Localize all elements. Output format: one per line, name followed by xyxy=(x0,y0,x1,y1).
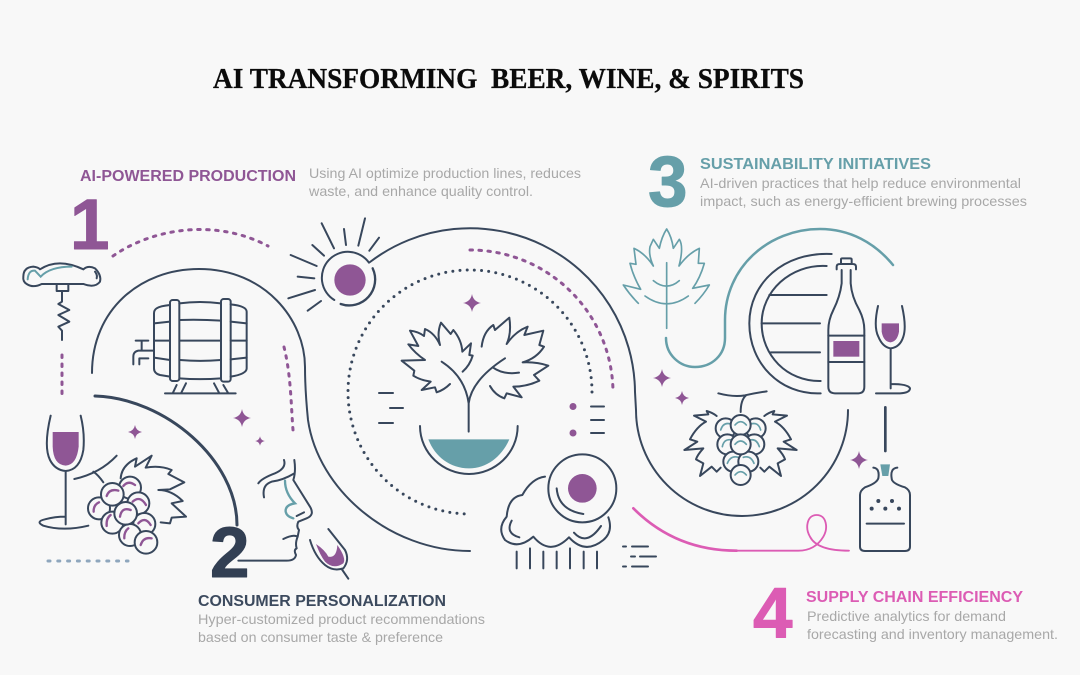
icon: sun xyxy=(288,218,379,311)
dashed line under corkscrew xyxy=(60,355,64,397)
connector: teal curve xyxy=(666,229,893,367)
dots and dashes right of plant xyxy=(570,403,604,436)
icon: barrel xyxy=(133,299,247,393)
step 3 heading: SUSTAINABILITY INITIATIVES xyxy=(700,156,931,173)
step 3 description: AI-driven practices that help reduce environmental xyxy=(700,175,1021,191)
icon: teal vine leaf xyxy=(623,229,709,328)
step 4 description: Predictive analytics for demand xyxy=(807,608,1006,624)
icon: sun and cloud with rain xyxy=(501,454,616,568)
connector: curve around barrel xyxy=(92,269,470,551)
icon: barrel end xyxy=(749,254,832,393)
icon: tilted wine glass xyxy=(310,529,348,579)
icon: wine glass left xyxy=(40,416,88,529)
step 4 heading: SUPPLY CHAIN EFFICIENCY xyxy=(806,589,1023,606)
step 1 number: 1 xyxy=(70,186,110,265)
step 2 number: 2 xyxy=(210,514,250,593)
dashed arc above barrel xyxy=(113,230,268,256)
icon: grape bunch left xyxy=(74,456,186,554)
decorative dashes right of cloud xyxy=(623,546,656,566)
connector: thick arc above grapes xyxy=(95,396,237,525)
step 4 number: 4 xyxy=(753,574,793,654)
icon: wine glass right xyxy=(876,306,910,393)
connector: pink loop xyxy=(633,508,849,551)
dashed arc around plant xyxy=(470,250,613,392)
step 4 description: forecasting and inventory management. xyxy=(807,626,1058,642)
step 1 description: Using AI optimize production lines, reduces xyxy=(309,165,581,181)
step 2 heading: CONSUMER PERSONALIZATION xyxy=(198,593,446,610)
icon: spirit jug xyxy=(860,407,910,551)
dashed line under grapes xyxy=(48,560,128,562)
icon: wine bottle xyxy=(828,258,864,393)
icon: nose xyxy=(238,460,312,561)
step 3 number: 3 xyxy=(648,143,688,222)
connector: curve from sun around plant and grapes xyxy=(370,228,848,516)
icon: grape bunch right xyxy=(684,391,797,485)
dotted circle around plant xyxy=(348,270,592,514)
sparkle stars xyxy=(128,294,868,469)
decorative dashes left of plant xyxy=(379,393,403,423)
step 3 description: impact, such as energy-efficient brewing processes xyxy=(700,193,1027,209)
step 1 heading: AI-POWERED PRODUCTION xyxy=(80,168,296,185)
title: AI TRANSFORMING BEER, WINE, & SPIRITS xyxy=(213,63,804,95)
step 1 description: waste, and enhance quality control. xyxy=(308,183,533,199)
step 2 description: Hyper-customized product recommendations xyxy=(198,611,485,627)
step 2 description: based on consumer taste & preference xyxy=(198,629,443,645)
icon: corkscrew xyxy=(23,263,100,340)
icon: plant in bowl xyxy=(402,318,548,474)
dashed arc beside nose xyxy=(284,347,293,430)
